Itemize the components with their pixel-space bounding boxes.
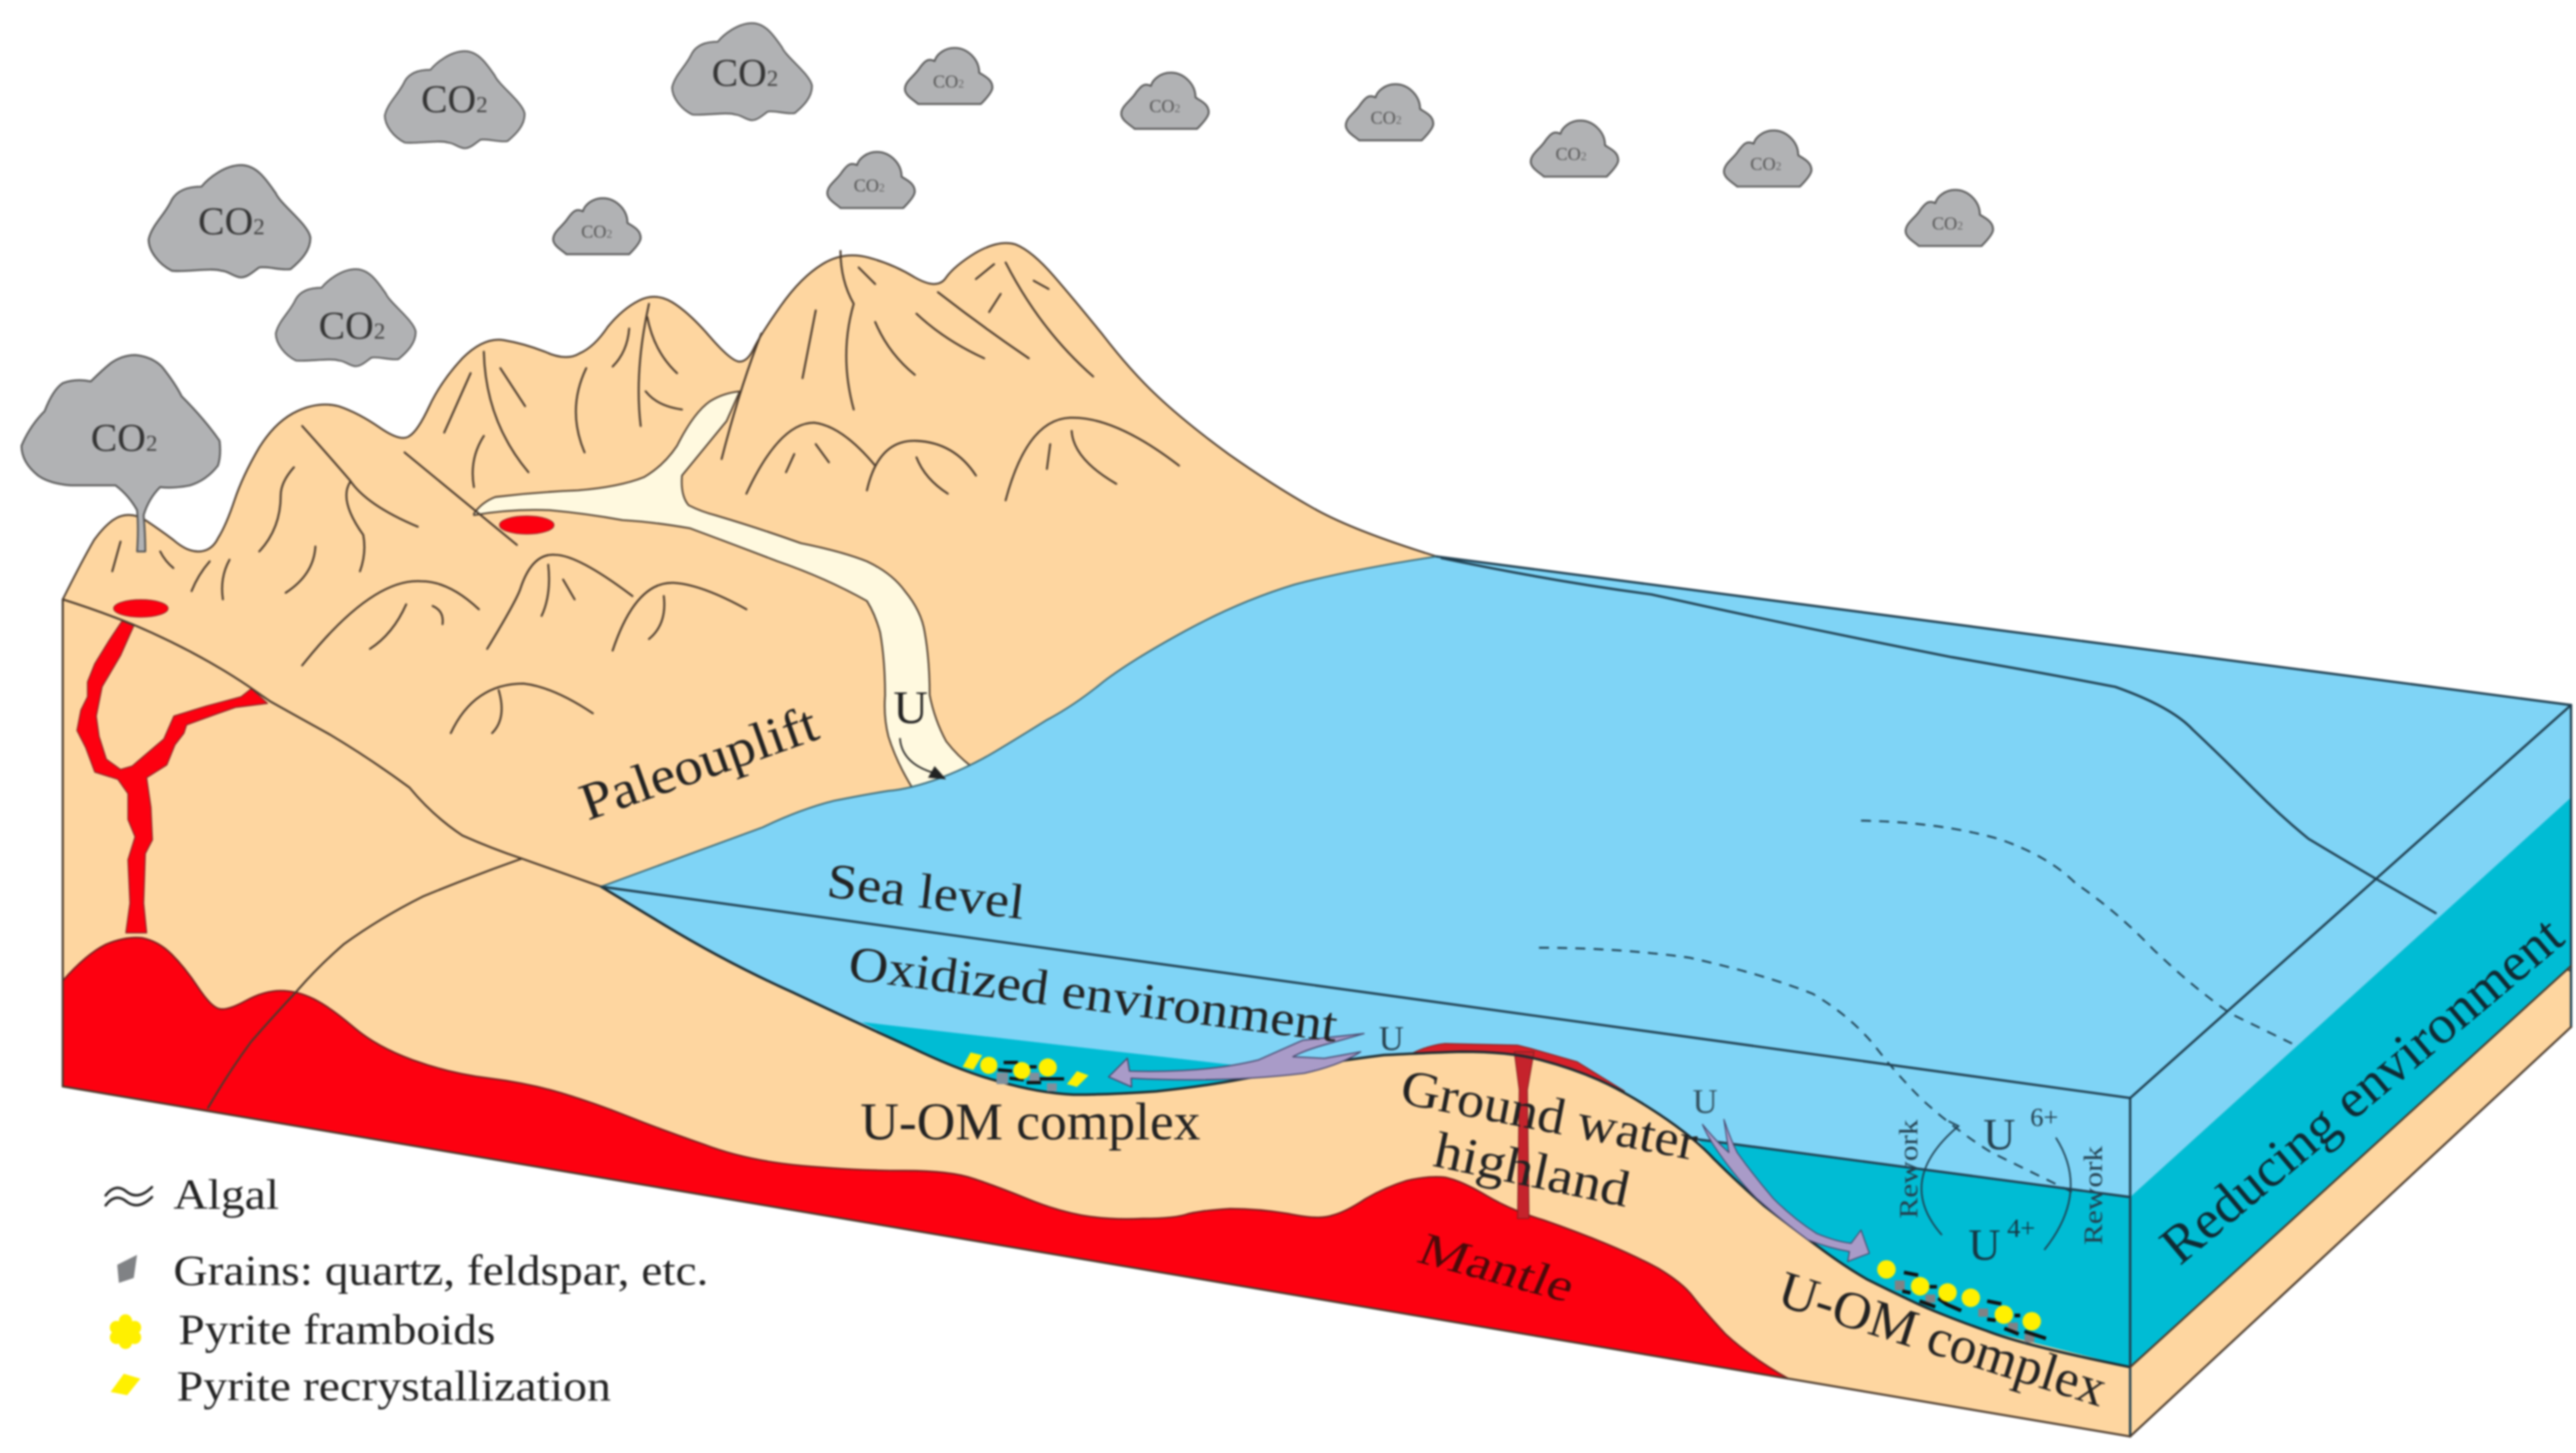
pyrite and grains: left basin — [963, 1053, 1089, 1091]
arrow: uranium to right basin — [1702, 1119, 1869, 1261]
reducing water layer: left basin — [862, 1022, 1285, 1095]
label: U-OM complex left: U-OM complex — [860, 1092, 1201, 1151]
small CO2 cloud e: CO2 — [1371, 108, 1402, 129]
seafloor and water outlines — [63, 557, 2571, 1437]
icon: pyrite framboids — [110, 1314, 141, 1349]
label: Reducing environment: Reducing environment — [2149, 904, 2575, 1275]
small CO2 cloud f — [1530, 121, 1618, 177]
hydrothermal cap on the highland — [1412, 1043, 1624, 1091]
volcano cloud CO2: CO2 — [91, 415, 157, 459]
small CO2 cloud b — [827, 152, 914, 208]
icon: algal — [106, 1187, 152, 1205]
CO2 cloud 4: CO2 — [712, 51, 778, 95]
pyrite and grains: right basin — [1877, 1260, 2046, 1343]
label: highland: highland — [1429, 1121, 1635, 1217]
reducing water layer: right face — [2130, 797, 2571, 1367]
small CO2 cloud g: CO2 — [1750, 154, 1781, 174]
volcano cloud CO2 — [22, 355, 220, 551]
hydrothermal conduit through the highland — [1514, 1052, 1534, 1218]
label: Mantle: Mantle — [1411, 1223, 1583, 1311]
dashed current lines — [1539, 821, 2292, 1192]
CO2 cloud 1: CO2 — [198, 199, 265, 243]
legend text: Pyrite recrystallization: Pyrite recrystallization — [177, 1362, 611, 1410]
river flow arrow — [900, 738, 946, 779]
CO2 cloud 3: CO2 — [421, 77, 487, 121]
volcanic surface vent: left — [114, 600, 168, 617]
block diagram: landmass and rock body — [63, 243, 2571, 1437]
CO2 cloud 1 — [148, 165, 311, 277]
legend — [106, 1171, 708, 1410]
CO2 cloud 3 — [385, 51, 525, 148]
label: Sea level: Sea level — [825, 853, 1027, 930]
small CO2 cloud g — [1724, 130, 1812, 186]
small CO2 cloud a: CO2 — [581, 222, 613, 242]
small CO2 cloud c: CO2 — [933, 71, 964, 91]
label: Oxidized environment: Oxidized environment — [845, 936, 1341, 1053]
icon: pyrite recrystallization — [110, 1374, 141, 1395]
small CO2 cloud h: CO2 — [1932, 213, 1963, 234]
small CO2 cloud b: CO2 — [854, 175, 885, 196]
small CO2 cloud a — [553, 198, 641, 255]
label: Paleouplift: Paleouplift — [572, 694, 826, 832]
small CO2 cloud d: CO2 — [1149, 96, 1180, 116]
small CO2 cloud d — [1122, 72, 1209, 129]
fault lines across the front face — [63, 600, 601, 1108]
CO2 cloud 4 — [672, 23, 812, 120]
label: Rework right: Rework — [2079, 1145, 2108, 1245]
ocean water: oxidized water body — [601, 557, 2571, 1197]
CO2 cloud 2 — [276, 269, 416, 366]
label: U-OM complex right: U-OM complex — [1771, 1260, 2114, 1418]
ridge lines on the mountains — [112, 251, 1179, 733]
label: U4+: 4+ — [2007, 1213, 2035, 1242]
river carrying uranium — [474, 392, 971, 789]
arrow: uranium to left basin — [1109, 1034, 1364, 1087]
label: U4+: U — [1969, 1221, 2001, 1270]
legend text: Algal: Algal — [173, 1171, 279, 1218]
rework arcs — [1921, 1121, 2070, 1250]
volcanic surface vent: river — [499, 516, 554, 534]
small CO2 cloud h — [1906, 190, 1993, 246]
reducing water layer: right basin — [1698, 1139, 2130, 1367]
small CO2 cloud f: CO2 — [1555, 144, 1586, 165]
label: U near right arrow: U — [1693, 1082, 1718, 1121]
label: U6+: U — [1983, 1110, 2015, 1160]
small CO2 cloud e — [1346, 85, 1433, 141]
label: U6+: 6+ — [2030, 1103, 2058, 1132]
igneous dike feeding the surface — [77, 621, 267, 933]
label: U in river: U — [894, 682, 928, 733]
label: Ground water: Ground water — [1397, 1058, 1703, 1172]
legend text: Pyrite framboids: Pyrite framboids — [179, 1306, 495, 1354]
small CO2 cloud c — [905, 47, 992, 104]
mantle — [63, 938, 1788, 1379]
label: Rework left: Rework — [1894, 1119, 1923, 1218]
icon: grains — [117, 1255, 137, 1283]
legend text: Grains: Grains: quartz, feldspar, etc. — [173, 1247, 708, 1294]
CO2 cloud 2: CO2 — [318, 303, 386, 347]
label: U near left arrow: U — [1379, 1019, 1404, 1058]
